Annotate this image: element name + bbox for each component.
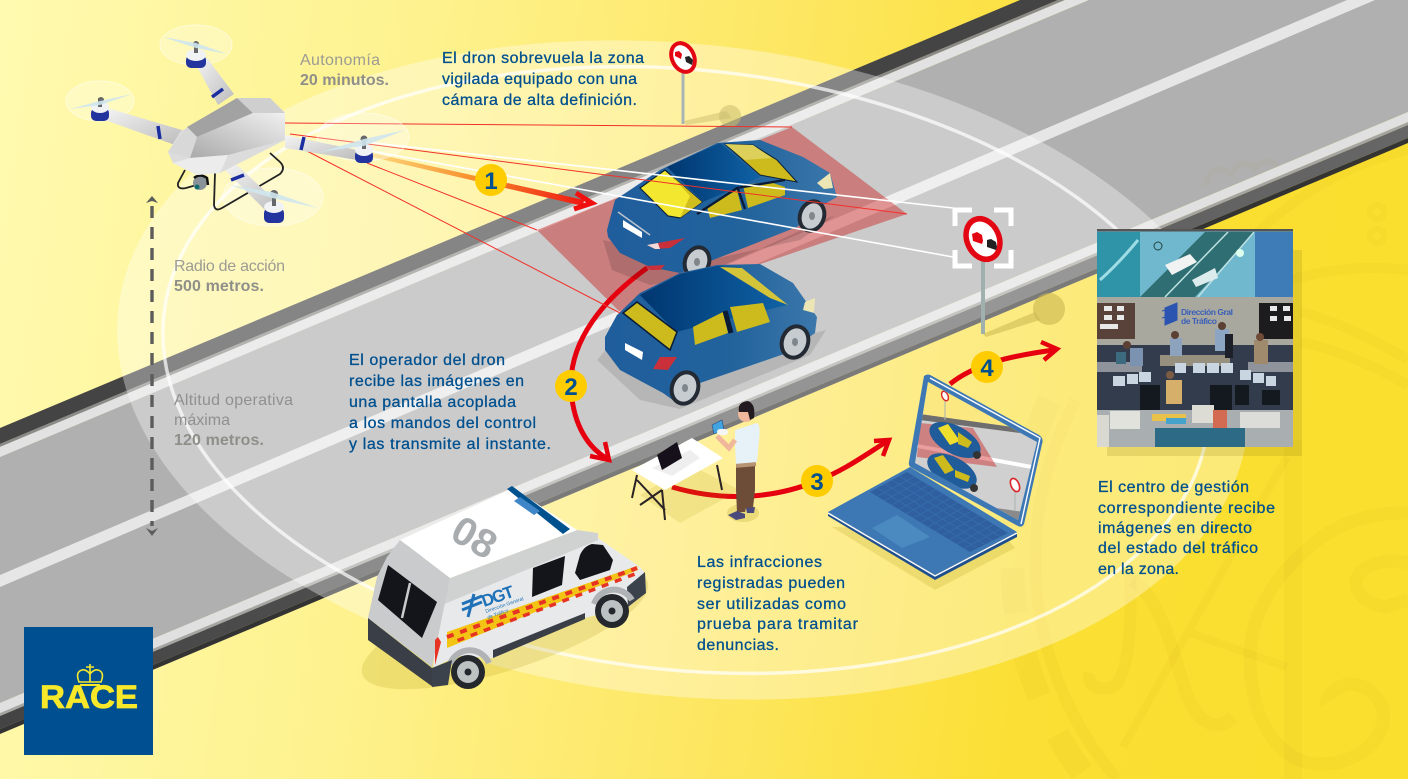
text: step 3: denuncias. xyxy=(697,637,779,654)
text: step 1 xyxy=(442,50,644,109)
laptop screen xyxy=(915,382,1037,520)
text: altitude: Altitud operativa xyxy=(174,392,293,409)
text: step 2: recibe las imágenes en xyxy=(349,373,524,390)
van logo: Dirección General xyxy=(485,596,525,615)
arrow 4: laptop to control centre xyxy=(950,342,1057,384)
arrow 3: operator to laptop xyxy=(672,440,889,497)
logo: RACE xyxy=(24,627,153,755)
text: step 3 xyxy=(697,554,859,654)
text: altitude: máxima xyxy=(174,412,230,429)
motors xyxy=(91,55,373,223)
number badges xyxy=(475,164,1003,497)
badge 1 xyxy=(475,164,507,196)
van logo: DGT xyxy=(479,582,517,611)
text: autonomy: Autonomía xyxy=(300,52,380,69)
text: step 4: imágenes en directo xyxy=(1098,520,1252,537)
photo wall sign xyxy=(1181,309,1232,324)
text: step 2: y las transmite al instante. xyxy=(349,436,551,453)
text: step 3: Las infracciones xyxy=(697,554,822,571)
text: step 4: correspondiente recibe xyxy=(1098,500,1275,517)
text: step 2: una pantalla acoplada xyxy=(349,394,516,411)
text: step 2 xyxy=(349,352,551,453)
operator xyxy=(712,401,760,522)
text: radius: Radio de acción xyxy=(174,258,285,275)
text: autonomy: 20 minutos. xyxy=(300,72,389,89)
photo: traffic control centre xyxy=(1097,229,1293,447)
car: lower hatchback xyxy=(597,264,826,410)
van: DGT xyxy=(349,486,661,714)
badge 2: 2 xyxy=(564,374,578,401)
logo: RACE: RACE xyxy=(40,679,138,715)
arrow 2: red curve from cars to operator xyxy=(571,268,647,460)
text: autonomy xyxy=(300,52,389,89)
text: radius: 500 metros. xyxy=(174,278,264,295)
van logo: de Tráfico xyxy=(487,608,510,621)
text: step 3: registradas pueden xyxy=(697,575,845,592)
van number: 08 xyxy=(444,508,504,568)
badge 1: 1 xyxy=(484,168,498,195)
photo wall sign: de Tráfico xyxy=(1181,316,1217,326)
arrow 1: drone to cars xyxy=(372,153,592,209)
propeller discs xyxy=(66,25,409,226)
photo people xyxy=(1116,322,1268,404)
icon: crown xyxy=(78,664,102,685)
text: step 2: a los mandos del control xyxy=(349,415,536,432)
icon: small traffic sign top xyxy=(667,39,741,127)
camera xyxy=(193,176,208,190)
text: step 4 xyxy=(1098,479,1275,578)
van logo xyxy=(462,582,525,621)
text: step 1: cámara de alta definición. xyxy=(442,92,637,109)
table xyxy=(632,438,740,523)
drone sensor lines xyxy=(285,123,953,313)
drone xyxy=(66,25,409,226)
text: step 3: ser utilizadas como xyxy=(697,596,846,613)
text: step 1: vigilada equipado con una xyxy=(442,71,637,88)
inner range ring xyxy=(133,17,1239,723)
surveillance zone xyxy=(537,127,907,312)
text: step 4: en la zona. xyxy=(1098,561,1179,578)
watermark emblem xyxy=(1012,150,1408,779)
badge 3: 3 xyxy=(810,469,824,496)
badge 2 xyxy=(555,370,587,402)
text: altitude: 120 metros. xyxy=(174,432,264,449)
icon: traffic sign with target brackets xyxy=(955,210,1065,337)
text: radius xyxy=(174,258,285,295)
text: step 2: El operador del dron xyxy=(349,352,505,369)
photo wall sign: Dirección Gral xyxy=(1181,307,1233,317)
photo shadow xyxy=(1107,250,1302,456)
badge 4: 4 xyxy=(980,355,994,382)
text: step 4: del estado del tráfico xyxy=(1098,540,1258,557)
text: step 3: prueba para tramitar xyxy=(697,616,859,633)
text: altitude xyxy=(174,392,293,449)
landing gear xyxy=(178,153,283,209)
propeller blades xyxy=(70,37,405,208)
car: upper sedan xyxy=(603,140,837,285)
arrow: altitude dashed xyxy=(146,196,158,536)
arms xyxy=(195,58,234,105)
body xyxy=(168,98,285,175)
text: step 1: El dron sobrevuela la zona xyxy=(442,50,644,67)
text: step 4: El centro de gestión xyxy=(1098,479,1249,496)
badge 4 xyxy=(971,351,1003,383)
laptop xyxy=(828,374,1045,590)
badge 3 xyxy=(801,465,833,497)
